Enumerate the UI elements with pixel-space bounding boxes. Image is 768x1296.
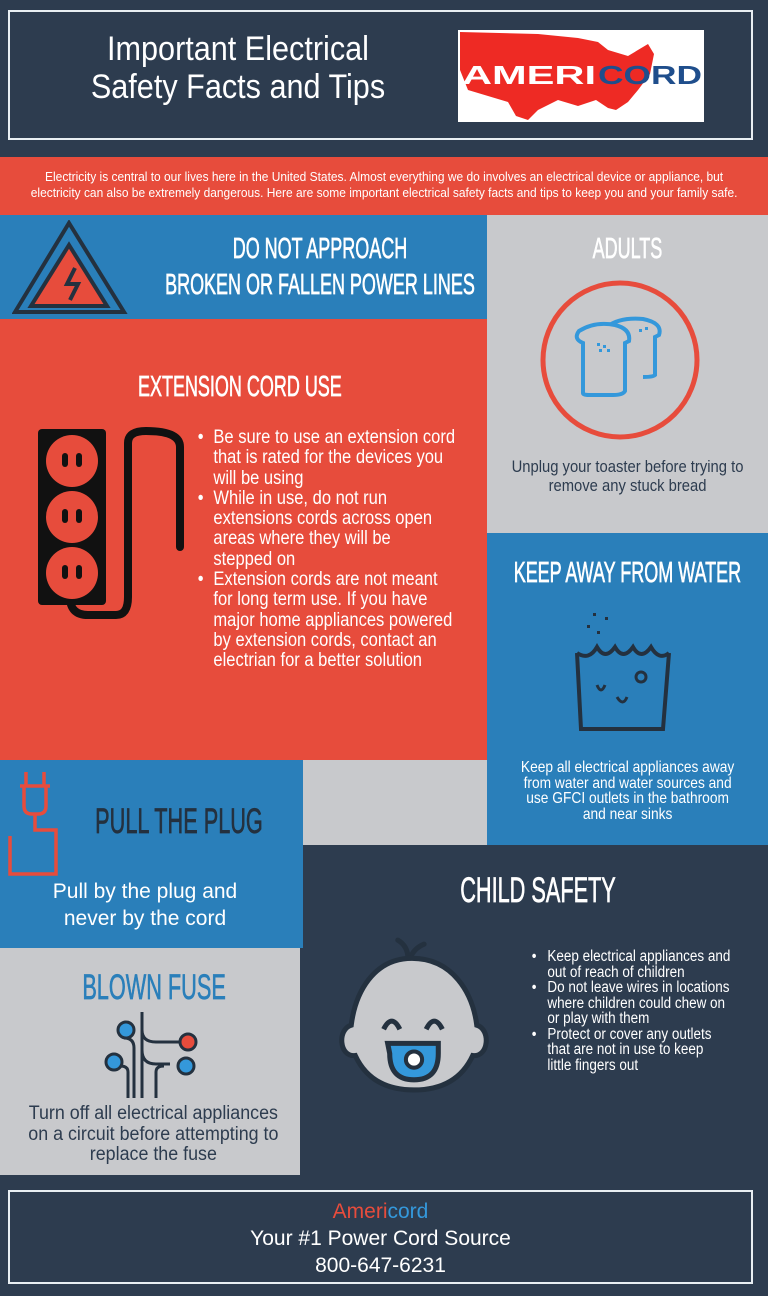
panel: blown fuse (0, 948, 300, 1175)
heading: KEEP AWAY FROM WATER (514, 557, 741, 589)
text (521, 759, 734, 822)
footer box (8, 1190, 753, 1284)
intro band (0, 157, 768, 215)
brand name: Americord (333, 1200, 428, 1223)
bullet list: little fingers out (547, 1056, 638, 1074)
heading: ADULTS (593, 233, 662, 265)
bullet list: for long term use. If you have (213, 589, 427, 610)
panel: power lines (0, 215, 487, 319)
filler grey block (303, 760, 487, 845)
heading (165, 233, 475, 301)
bullet list: where children could chew on (547, 994, 725, 1012)
bullet list: Keep electrical appliances and (547, 948, 730, 965)
tagline: Your #1 Power Cord Source (250, 1227, 511, 1250)
text (53, 880, 237, 930)
bullet list: stepped on (213, 549, 295, 570)
icon: circuit (104, 1012, 198, 1098)
title (91, 30, 385, 106)
bullet list: will be using (213, 468, 303, 489)
bullet list: While in use, do not run (213, 488, 387, 509)
icon: water glass (575, 613, 671, 731)
heading: DO NOT APPROACH (233, 233, 407, 265)
bullet list: major home appliances powered (213, 610, 452, 631)
panel: keep away from water (487, 533, 768, 845)
heading: PULL THE PLUG (95, 802, 263, 841)
icon: toast (540, 280, 700, 440)
heading: EXTENSION CORD USE (138, 371, 342, 403)
title: Important Electrical (107, 30, 369, 68)
logo: CORD (598, 60, 702, 90)
phone: 800-647-6231 (315, 1254, 446, 1277)
icon: warning triangle (12, 220, 128, 314)
panel: extension cord (0, 319, 487, 760)
bullet list (198, 427, 455, 671)
bullet list: electrian for a better solution (213, 650, 422, 671)
panel: adults (487, 215, 768, 533)
bullet list: Protect or cover any outlets (547, 1026, 712, 1042)
text: never by the cord (64, 907, 226, 930)
text: use GFCI outlets in the bathroom (526, 790, 729, 807)
bullet list: out of reach of children (547, 964, 685, 980)
bullet list: Do not leave wires in locations (547, 979, 730, 996)
icon: plug (8, 772, 58, 876)
bullet list: areas where they will be (213, 528, 391, 549)
heading: BROKEN OR FALLEN POWER LINES (165, 269, 475, 301)
text (512, 457, 743, 495)
panel: pull the plug (0, 760, 303, 948)
icon: baby face (339, 938, 489, 1092)
heading: BLOWN FUSE (82, 968, 226, 1007)
logo: AMERI (462, 60, 596, 90)
header box (8, 10, 753, 140)
bullet list: or play with them (547, 1010, 649, 1027)
bullet list: by extension cords, contact an (213, 630, 437, 651)
title: Safety Facts and Tips (91, 68, 385, 106)
text: on a circuit before attempting to (28, 1124, 278, 1144)
text (28, 1103, 278, 1165)
text: from water and water sources and (524, 774, 732, 792)
bullet list: that are not in use to keep (547, 1041, 703, 1058)
text: Keep all electrical appliances away (521, 759, 734, 776)
bullet list: that is rated for the devices you (213, 447, 443, 468)
text: remove any stuck bread (549, 476, 706, 495)
text: and near sinks (583, 806, 672, 822)
heading: CHILD SAFETY (460, 871, 616, 910)
bullet list: Extension cords are not meant (213, 569, 438, 590)
text: Unplug your toaster before trying to (512, 457, 743, 476)
text: replace the fuse (90, 1144, 217, 1165)
panel: child safety (339, 871, 730, 1092)
intro band: Electricity is central to our lives here in the United States. Almost everything we do involves an electrical device or appliance, but (45, 169, 723, 184)
text: Turn off all electrical appliances (29, 1103, 278, 1124)
logo (458, 30, 704, 122)
icon: power strip (38, 427, 184, 619)
bullet list: Be sure to use an extension cord (213, 427, 455, 448)
bullet list (532, 948, 730, 1074)
text: Pull by the plug and (53, 880, 237, 903)
bullet list: extensions cords across open (213, 508, 432, 529)
intro band: electricity can also be extremely dangerous. Here are some important electrical safety facts and tips to keep you and your family safe. (31, 185, 737, 200)
